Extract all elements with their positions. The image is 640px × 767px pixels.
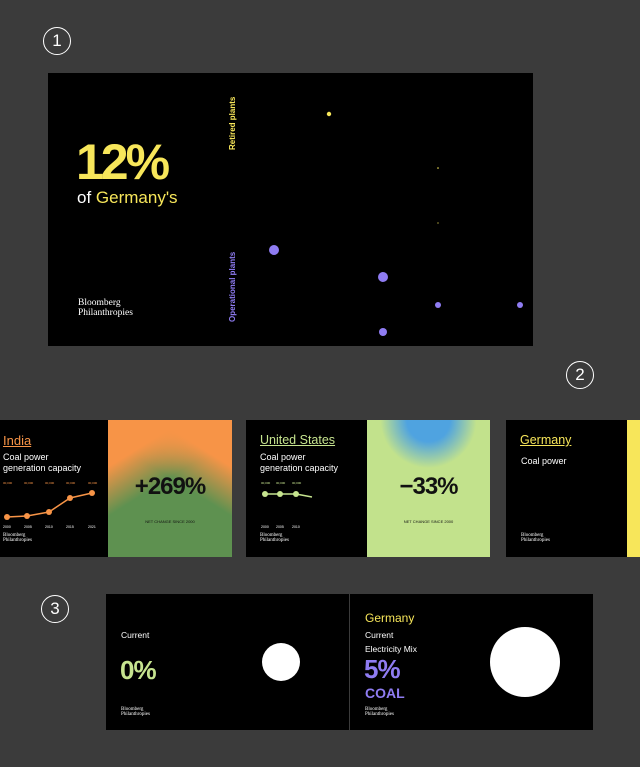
logo: Bloomberg (521, 533, 543, 538)
line chart: 00,000 (45, 481, 55, 485)
step badge 1 (43, 27, 71, 55)
logo: Philanthropies (78, 308, 133, 318)
logo: Bloomberg (260, 533, 282, 538)
label: Current (121, 630, 149, 640)
logo: Philanthropies (521, 538, 550, 543)
line chart: 2010 (292, 525, 300, 529)
panel: Germany (506, 420, 627, 557)
line chart: 00,000 (66, 481, 76, 485)
line chart: 2021 (88, 525, 96, 529)
logo (121, 706, 150, 717)
subtitle: of Germany's (77, 188, 178, 207)
line chart: 00,000 (276, 481, 286, 485)
logo (521, 532, 550, 543)
heading: Germany (520, 433, 571, 447)
line chart: 00,000 (24, 481, 34, 485)
panel: India stat (108, 420, 232, 557)
logo (260, 532, 289, 543)
line chart: 00,000 (3, 481, 13, 485)
dot chart (269, 112, 523, 336)
heading: India (3, 433, 31, 448)
subtitle: Coal power (3, 452, 49, 462)
subtitle (365, 630, 417, 654)
subtitle: Coal power (260, 452, 306, 462)
subtitle (3, 452, 81, 473)
panel: India stat: NET CHANGE SINCE 2000 (145, 519, 195, 524)
subtitle: Electricity Mix (365, 644, 417, 654)
line chart: 00,000 (88, 481, 98, 485)
logo: Philanthropies (260, 538, 289, 543)
subtitle (260, 452, 338, 473)
logo: Philanthropies (365, 712, 394, 717)
line chart: 2000 (3, 525, 11, 529)
panel: electricity mix right: COAL (365, 685, 405, 701)
line chart: 2005 (24, 525, 32, 529)
circle (262, 643, 300, 681)
logo: Bloomberg (121, 707, 143, 712)
logo: Bloomberg (78, 298, 121, 308)
line chart: 2005 (276, 525, 284, 529)
logo: Philanthropies (121, 712, 150, 717)
big stat 12%: 12% (76, 134, 167, 190)
logo: Bloomberg (365, 707, 387, 712)
label operational plants: Operational plants (228, 252, 237, 322)
step badge 3 (41, 595, 69, 623)
stat: 5% (364, 654, 400, 684)
step badge 1: 1 (52, 31, 62, 50)
subtitle: generation capacity (260, 463, 338, 473)
heading: Germany (365, 611, 414, 625)
step badge 2: 2 (575, 365, 585, 384)
logo (3, 532, 32, 543)
logo (365, 706, 394, 717)
panel: US stat (367, 420, 490, 557)
circle (490, 627, 560, 697)
heading: United States (260, 433, 335, 447)
panel: electricity mix right (350, 594, 593, 730)
panel: United States (246, 420, 367, 557)
line chart (3, 481, 98, 529)
panel: Germany plants (48, 73, 533, 346)
line chart: 2000 (261, 525, 269, 529)
line chart: 2010 (45, 525, 53, 529)
line chart: 00,000 (292, 481, 302, 485)
panel: India (0, 420, 108, 557)
panel: electricity mix left (106, 594, 349, 730)
step badge 3: 3 (50, 599, 60, 618)
stat: −33% (399, 473, 458, 500)
subtitle: generation capacity (3, 463, 81, 473)
label retired plants: Retired plants (228, 97, 237, 150)
Germany stat strip (627, 420, 640, 557)
logo: Philanthropies (3, 538, 32, 543)
subtitle: Current (365, 630, 393, 640)
stat: 0% (120, 655, 156, 685)
line chart: 00,000 (261, 481, 271, 485)
line chart (261, 481, 312, 529)
panel: US stat: NET CHANGE SINCE 2000 (404, 519, 453, 524)
stat: +269% (135, 473, 205, 500)
line chart: 2015 (66, 525, 74, 529)
logo (78, 298, 133, 318)
subtitle: Coal power (521, 456, 567, 466)
logo: Bloomberg (3, 533, 25, 538)
step badge 2 (566, 361, 594, 389)
